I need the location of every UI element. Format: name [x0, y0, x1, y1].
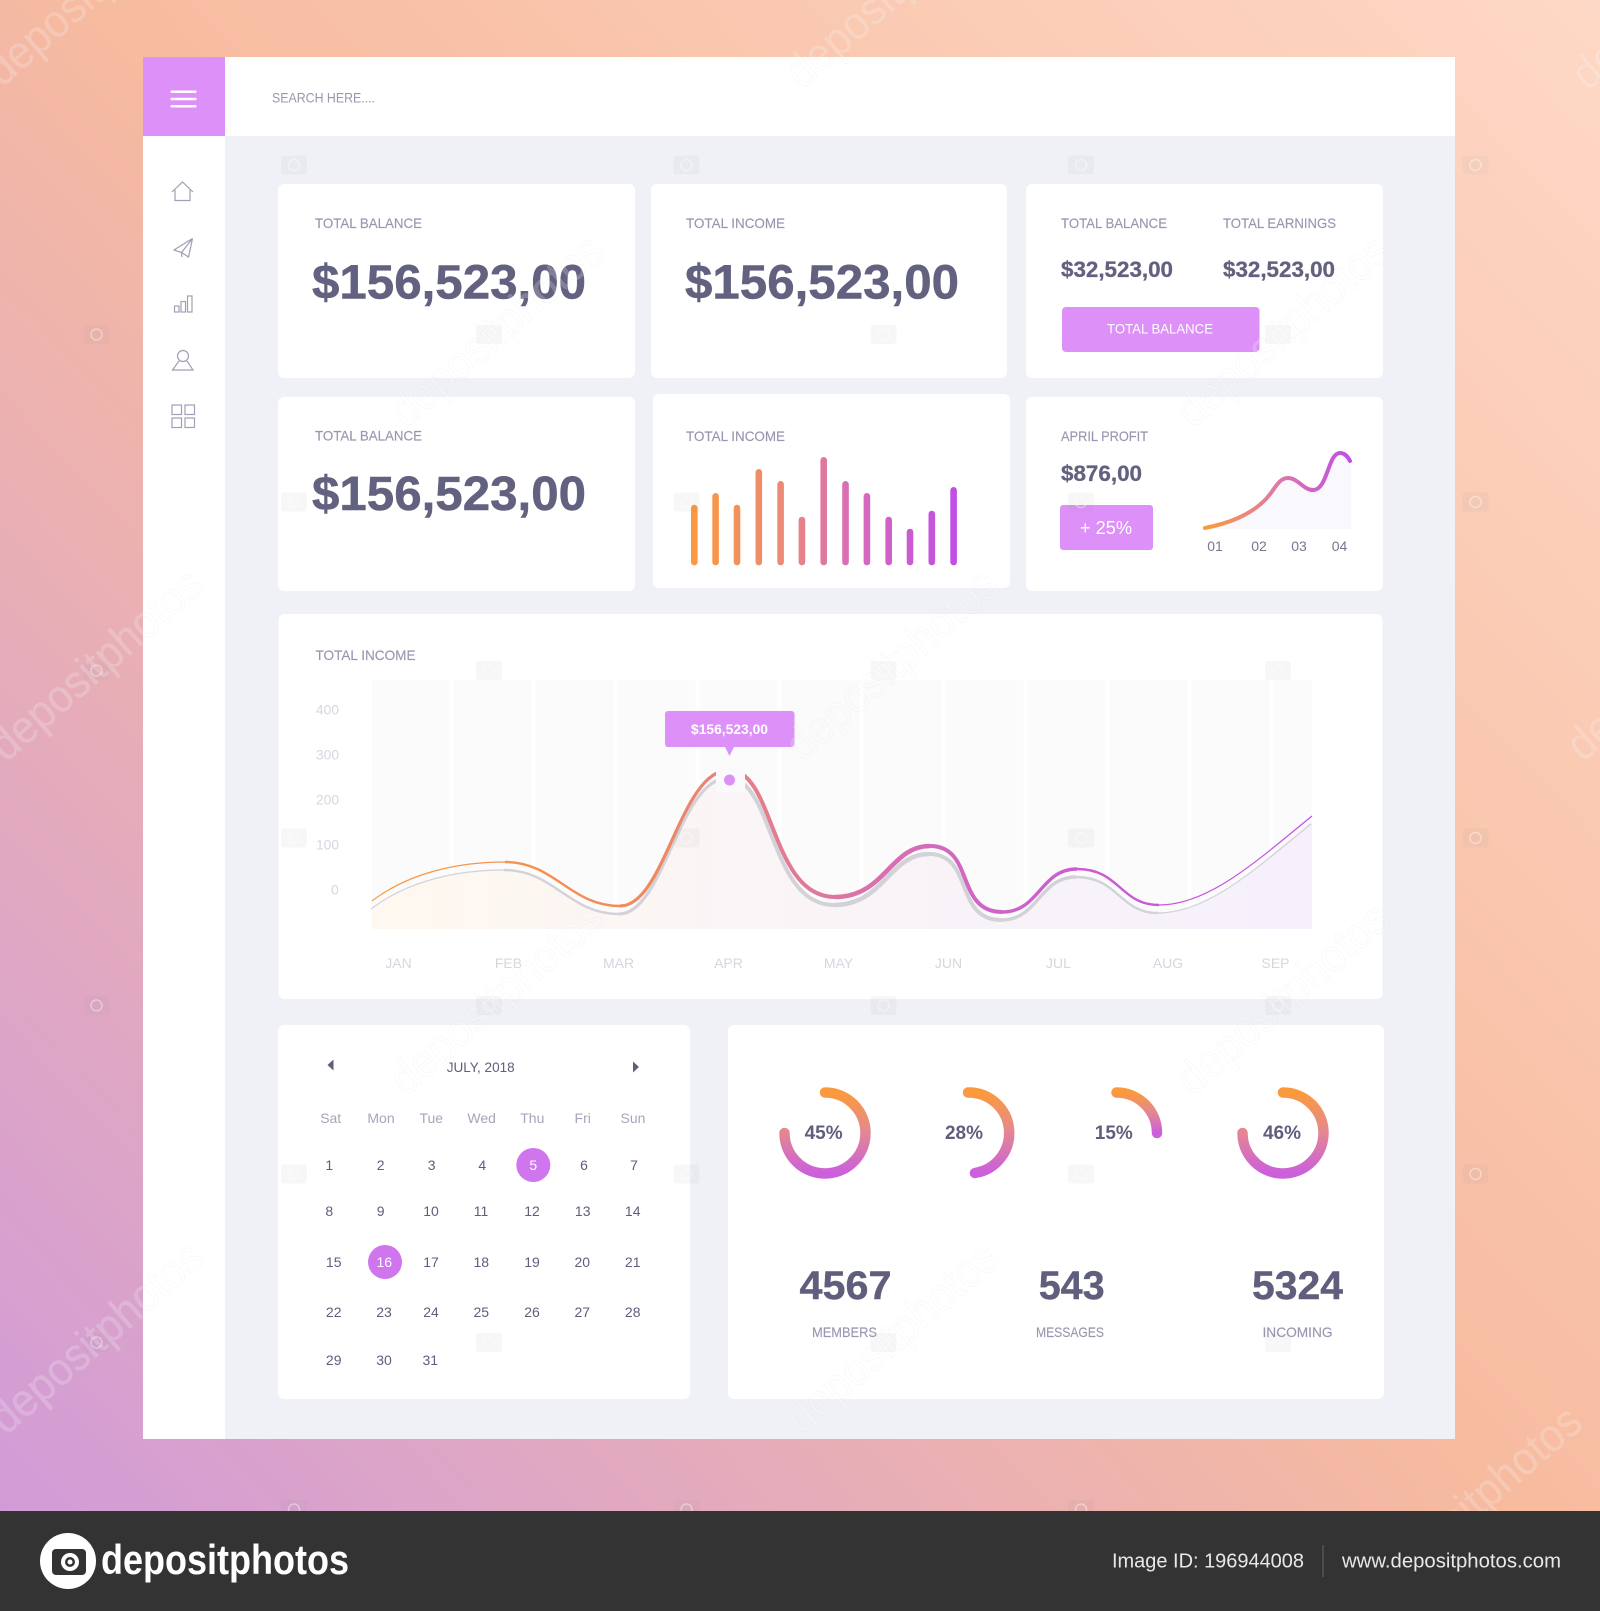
x axis months: SEP: [1261, 955, 1290, 971]
calendar dates: 14: [625, 1203, 641, 1219]
calendar dates: 13: [575, 1203, 591, 1219]
x axis months: JUL: [1046, 955, 1071, 971]
calendar header: [328, 1059, 639, 1075]
y axis labels: 0: [331, 882, 339, 898]
calendar dates: 2: [377, 1157, 385, 1173]
panel: total balance: TOTAL BALANCE: [315, 215, 422, 231]
stat: messages: MESSAGES: [1036, 1324, 1104, 1340]
calendar dates: 5: [529, 1157, 537, 1173]
y axis labels: 400: [316, 702, 339, 718]
donut 15 percent: 15%: [1095, 1123, 1133, 1144]
stat: members: MEMBERS: [812, 1324, 877, 1340]
x axis months: MAY: [824, 955, 854, 971]
bar chart: [691, 457, 957, 565]
calendar dates: 31: [423, 1352, 438, 1368]
weekday labels: Thu: [520, 1110, 544, 1126]
panel: total balance: [278, 184, 635, 378]
panel: april profit: APRIL PROFIT: [1061, 428, 1148, 444]
top search bar: SEARCH HERE....: [272, 90, 375, 106]
mini line chart: 02: [1251, 538, 1267, 554]
calendar dates: [325, 1157, 641, 1368]
top search bar: [225, 57, 1455, 136]
stat: incoming: 5324: [1252, 1264, 1344, 1308]
watermark overlay: depositphotos: [774, 1230, 1009, 1444]
x axis months: JAN: [385, 955, 412, 971]
badge: plus 25 percent: [1060, 505, 1153, 550]
footer bar: [0, 1511, 1600, 1611]
panel: total income line chart: TOTAL INCOME: [316, 647, 416, 663]
calendar dates: 3: [428, 1157, 436, 1173]
panel: total balance row two: [278, 397, 635, 591]
panel: april profit: $876,00: [1061, 461, 1142, 486]
tooltip: $156,523,00: [691, 722, 768, 737]
donut 15 percent: [1095, 1092, 1157, 1144]
weekday labels: Mon: [367, 1110, 395, 1126]
calendar dates: 26: [524, 1304, 540, 1320]
watermark overlay: depositphotos: [378, 223, 613, 437]
y axis labels: 200: [316, 792, 339, 808]
logo wordmark: depositphotos: [101, 1536, 349, 1583]
panel: total balance row two: $156,523,00: [312, 468, 586, 521]
tooltip: [665, 711, 794, 756]
calendar dates: 16: [377, 1254, 392, 1270]
icon: home: [172, 182, 193, 200]
panel: total income: TOTAL INCOME: [686, 215, 785, 231]
calendar dates: 18: [474, 1254, 489, 1270]
x axis months: MAR: [603, 955, 634, 971]
panel: balance and earnings: [1026, 184, 1383, 378]
highlighted dates: [368, 1148, 550, 1279]
panel: balance and earnings: $32,523,00: [1061, 257, 1173, 282]
calendar dates: 17: [423, 1254, 439, 1270]
calendar dates: 20: [575, 1254, 590, 1270]
calendar dates: 6: [580, 1157, 588, 1173]
x axis months: [385, 955, 1290, 971]
stat: members: [800, 1264, 892, 1340]
y axis labels: 100: [316, 836, 339, 852]
panel: income bar chart: [653, 394, 1010, 588]
calendar dates: 1: [325, 1157, 333, 1173]
button: total balance: TOTAL BALANCE: [1107, 320, 1213, 336]
donut 45 percent: [784, 1092, 866, 1174]
donut 28 percent: 28%: [945, 1123, 983, 1144]
button: total balance: [1062, 307, 1260, 352]
stat: members: 4567: [800, 1264, 892, 1308]
watermark overlay: depositphotos: [774, 557, 1009, 771]
y axis labels: [316, 702, 339, 898]
panel: total balance: $156,523,00: [312, 256, 586, 310]
donut 46 percent: [1242, 1092, 1324, 1174]
x axis months: FEB: [495, 955, 522, 971]
weekday labels: Sat: [320, 1110, 341, 1126]
stat: messages: [1036, 1264, 1105, 1340]
calendar dates: 7: [630, 1157, 638, 1173]
peak marker: [716, 762, 745, 792]
watermark overlay: depositphotos: [1165, 223, 1400, 437]
calendar dates: 23: [376, 1304, 392, 1320]
website: www.depositphotos.com: [1341, 1550, 1561, 1572]
calendar dates: 28: [625, 1304, 641, 1320]
line shadow: [371, 778, 1311, 920]
stat: messages: 543: [1039, 1264, 1105, 1308]
panel: balance and earnings: TOTAL BALANCE: [1061, 215, 1167, 231]
watermark overlay: depositphotos: [378, 891, 613, 1105]
icon: send: [174, 238, 192, 257]
calendar dates: 21: [625, 1254, 641, 1270]
weekday labels: Tue: [419, 1110, 443, 1126]
watermark overlay: depositphotos: [1165, 891, 1400, 1105]
x axis months: JUN: [935, 955, 962, 971]
sidebar: [143, 136, 225, 1439]
calendar dates: 19: [524, 1254, 540, 1270]
donut 28 percent: [945, 1092, 1009, 1173]
income curve: [372, 770, 1312, 912]
x axis months: APR: [714, 955, 743, 971]
calendar dates: 22: [326, 1304, 342, 1320]
calendar dates: 15: [326, 1254, 342, 1270]
calendar dates: 12: [524, 1203, 540, 1219]
calendar dates: 30: [376, 1352, 392, 1368]
icon: bars: [174, 296, 192, 312]
calendar dates: 4: [478, 1157, 486, 1173]
panel: total balance row two: TOTAL BALANCE: [315, 428, 422, 444]
menu button: [143, 57, 225, 136]
calendar dates: 24: [423, 1304, 439, 1320]
x axis months: AUG: [1153, 955, 1183, 971]
icon: grid: [172, 405, 194, 428]
panel: total income: $156,523,00: [685, 256, 959, 310]
panel: april profit: [1026, 397, 1383, 591]
y axis labels: 300: [316, 746, 339, 762]
stat: incoming: INCOMING: [1262, 1324, 1332, 1340]
badge: plus 25 percent: + 25%: [1080, 518, 1132, 538]
mini line chart: 04: [1332, 538, 1347, 554]
calendar dates: 11: [474, 1203, 488, 1219]
mini line chart: [1205, 453, 1351, 554]
stat: incoming: [1252, 1264, 1344, 1340]
donut 45 percent: 45%: [805, 1123, 843, 1144]
calendar dates: 8: [325, 1203, 333, 1219]
calendar dates: 10: [423, 1203, 439, 1219]
chart plot stripes: [372, 680, 1312, 929]
calendar dates: 25: [474, 1304, 489, 1320]
calendar dates: 29: [326, 1352, 342, 1368]
weekday labels: Sun: [621, 1110, 645, 1126]
panel: total income line chart: [278, 614, 1382, 999]
calendar header: JULY, 2018: [447, 1059, 515, 1075]
panel: income bar chart: TOTAL INCOME: [686, 428, 785, 444]
calendar dates: 9: [377, 1203, 385, 1219]
panel: donuts and stats: [728, 1025, 1384, 1399]
weekday labels: [320, 1110, 645, 1126]
mini line chart: 03: [1291, 538, 1307, 554]
icon: user: [172, 350, 193, 370]
panel: balance and earnings: $32,523,00: [1223, 257, 1335, 282]
panel: total income: [651, 184, 1007, 378]
panel: calendar: [278, 1025, 690, 1399]
panel: balance and earnings: TOTAL EARNINGS: [1223, 215, 1336, 231]
image id: Image ID: 196944008: [1112, 1550, 1304, 1572]
logo icon: [40, 1533, 96, 1589]
area fill: [372, 778, 1312, 929]
mini line chart: 01: [1207, 538, 1223, 554]
donut 46 percent: 46%: [1263, 1123, 1301, 1144]
weekday labels: Fri: [575, 1110, 591, 1126]
weekday labels: Wed: [467, 1110, 496, 1126]
dashboard window: [143, 57, 1455, 1439]
calendar dates: 27: [575, 1304, 590, 1320]
